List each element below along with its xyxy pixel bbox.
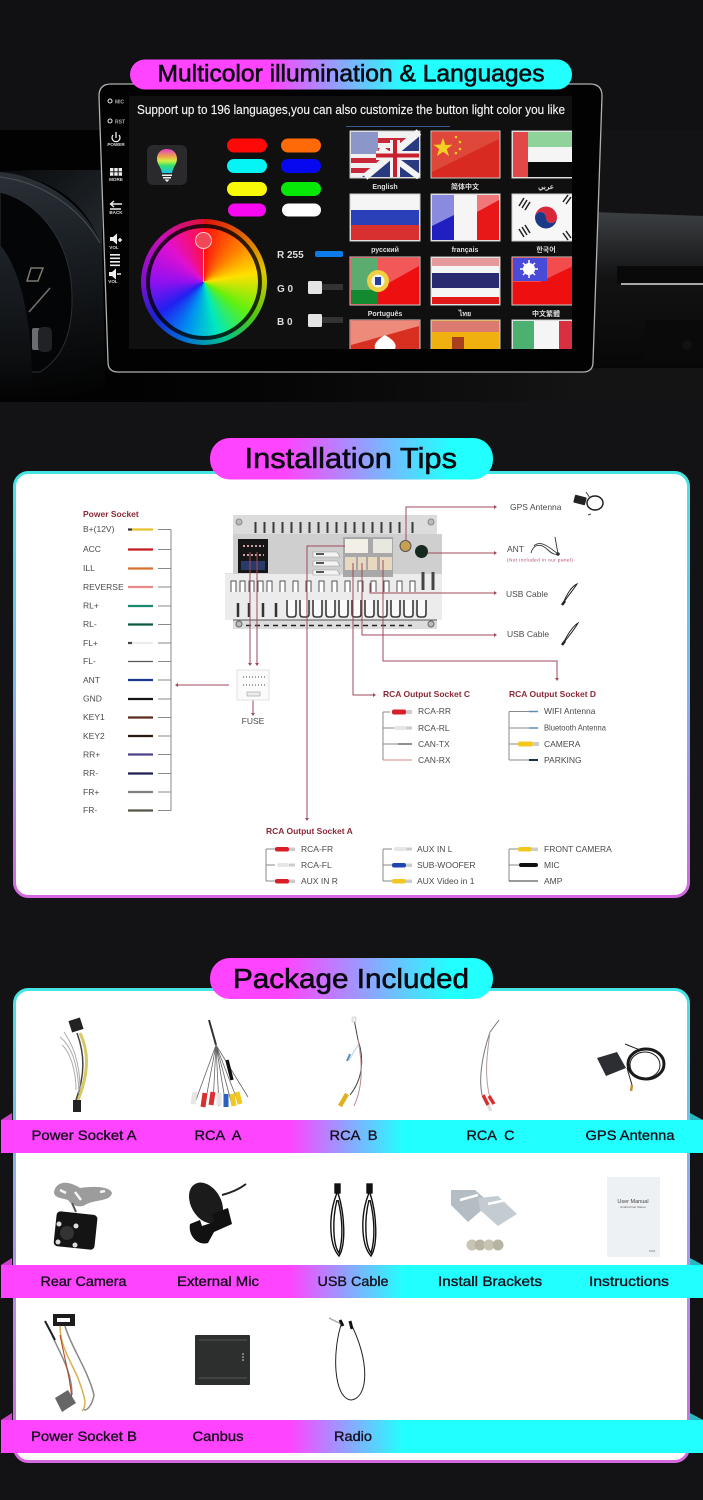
power socket list: RL+ <box>83 600 99 610</box>
peripheral labels: USB Cable <box>507 629 549 639</box>
flag: English <box>350 131 420 178</box>
power socket list: KEY1 <box>83 712 105 722</box>
power socket list: KEY2 <box>83 731 105 741</box>
side control icons: BACK <box>109 210 123 215</box>
RCA output socket D <box>509 689 606 765</box>
flag language labels: 简体中文 <box>451 182 479 191</box>
RCA output socket A <box>266 826 612 886</box>
peripheral labels: (Not included in our panel) <box>507 558 573 564</box>
title pill: multicolor illumination: Multicolor illumination & Languages <box>158 60 544 88</box>
flag language labels: русский <box>371 246 399 254</box>
flag: Arabic <box>512 131 574 178</box>
RCA output socket A: RCA Output Socket A <box>266 826 353 836</box>
peripheral labels <box>506 502 573 639</box>
side control icons: VOL <box>108 279 118 284</box>
RGB sliders: R 255 <box>277 250 304 261</box>
fuse box <box>237 670 269 726</box>
item: external microphone <box>182 1176 246 1243</box>
heading: installation tips: Installation Tips <box>244 443 457 475</box>
RGB sliders: G 0 <box>277 284 294 295</box>
icon: USB cable 2 <box>562 623 578 645</box>
band 1 of labels: Power Socket A <box>32 1127 137 1143</box>
plugs: third column: FRONT CAMERA <box>544 844 612 854</box>
peripheral labels: ANT <box>507 544 524 554</box>
head unit device frame <box>99 84 602 372</box>
flag: Italian <box>512 320 572 349</box>
flag language labels: français <box>452 247 479 254</box>
plugs: first column <box>266 844 338 886</box>
item: RCA B harness <box>340 1017 362 1106</box>
plugs: second column: AUX Video in 1 <box>417 876 475 886</box>
RCA output socket C: RCA Output Socket C <box>383 689 470 699</box>
flag language labels: English <box>372 184 398 191</box>
item: power socket A harness <box>60 1017 86 1112</box>
flag: Portuguese <box>350 257 420 305</box>
RCA output socket D: WIFI Antenna <box>544 706 596 716</box>
flag: Korean <box>512 194 574 241</box>
power socket list: ILL <box>83 563 95 573</box>
flag: French <box>431 194 500 241</box>
plugs: first column: RCA-FR <box>301 844 333 854</box>
socket wires <box>128 530 153 810</box>
power socket list: FR- <box>83 805 97 815</box>
item: instructions manual: User Manual <box>617 1199 649 1205</box>
item: install brackets and screws <box>451 1190 517 1250</box>
power socket list: FR+ <box>83 787 99 797</box>
band 1 of labels: RCA C <box>466 1127 514 1143</box>
plugs: first column: AUX IN R <box>301 876 338 886</box>
support text: Support up to 196 languages,you can also customize the button light color you like <box>137 102 565 117</box>
item: rear camera <box>53 1183 112 1250</box>
flag language labels: ไทย <box>458 309 471 318</box>
side control icons: RST <box>115 120 125 126</box>
power socket list: RL- <box>83 619 97 629</box>
power socket list: ANT <box>83 675 100 685</box>
item: GPS antenna <box>597 1044 664 1091</box>
side control icons: MIC <box>115 100 125 106</box>
heading: package included <box>210 958 493 999</box>
band 2 of labels: External Mic <box>177 1273 259 1289</box>
power socket list: Power Socket <box>83 509 139 519</box>
power socket list: GND <box>83 694 102 704</box>
language flags <box>346 126 574 360</box>
item: RCA A harness <box>193 1020 248 1107</box>
flag: Spanish <box>430 320 500 349</box>
item: USB cables <box>331 1184 376 1256</box>
band 3 of labels: Power Socket B <box>31 1428 137 1444</box>
background photo: car dashboard <box>0 0 703 402</box>
flag: Traditional Chinese <box>512 257 574 305</box>
colour buttons <box>227 138 321 216</box>
RGB sliders: B 0 <box>277 317 293 328</box>
lower vent slots <box>238 603 276 617</box>
band 3 of labels: Canbus <box>192 1428 244 1444</box>
band 3 of labels: Radio <box>334 1428 372 1444</box>
peripheral labels: GPS Antenna <box>510 502 562 512</box>
band 1 of labels <box>1 1113 703 1153</box>
icon: AM/FM antenna <box>531 537 559 555</box>
flag language labels: 中文繁體 <box>532 309 560 318</box>
flag: Simplified Chinese <box>431 131 500 178</box>
side control icons: VOL <box>109 245 119 250</box>
RCA connector block <box>343 537 393 577</box>
side control icons: MORE <box>109 177 123 182</box>
plugs: third column: MIC <box>544 860 560 870</box>
item: RCA C harness <box>481 1020 499 1111</box>
RCA output socket C: CAN-TX <box>418 739 450 749</box>
item: radio antenna lead <box>329 1318 365 1400</box>
item: instructions manual <box>607 1177 660 1257</box>
side control icons: POWER <box>107 142 125 147</box>
RCA output socket C: RCA-RR <box>418 706 451 716</box>
band 2 of labels: Install Brackets <box>438 1273 542 1289</box>
power socket list: RR- <box>83 768 98 778</box>
screen <box>129 96 572 349</box>
flag language labels: 한국어 <box>536 245 556 254</box>
band 1 of labels: RCA B <box>330 1127 378 1143</box>
band 1 of labels: RCA A <box>194 1127 242 1143</box>
plugs: second column: AUX IN L <box>417 844 453 854</box>
flag language labels: عربي <box>538 184 554 192</box>
RCA output socket C: RCA-RL <box>418 723 450 733</box>
heading: installation tips <box>210 438 493 480</box>
band 2 of labels: USB Cable <box>318 1273 389 1289</box>
icon: USB cable 1 <box>562 584 577 605</box>
power socket list: FL+ <box>83 638 98 648</box>
peripheral labels: USB Cable <box>506 589 548 599</box>
band 2 of labels: Instructions <box>589 1273 669 1289</box>
band 3 of labels <box>1 1413 703 1453</box>
power socket list: REVERSE <box>83 582 124 592</box>
rear panel of head unit <box>225 515 442 629</box>
icon: GPS antenna <box>573 492 603 515</box>
panel: installation tips <box>14 472 688 896</box>
RCA output socket D: PARKING <box>544 755 582 765</box>
power socket list <box>83 509 171 815</box>
power socket list: RR+ <box>83 750 100 760</box>
flag language labels <box>368 182 560 318</box>
plugs: first column: RCA-FL <box>301 860 332 870</box>
black power connector <box>238 539 268 573</box>
item: instructions manual: V3.0 <box>649 1249 656 1253</box>
RCA output socket C: CAN-RX <box>418 755 451 765</box>
item: power socket B harness <box>45 1314 94 1412</box>
band 2 of labels: Rear Camera <box>40 1273 127 1289</box>
flag: Russian <box>350 194 420 241</box>
RCA output socket D: CAMERA <box>544 739 581 749</box>
plugs: third column: AMP <box>544 876 563 886</box>
heading: package included: Package Included <box>233 963 469 994</box>
mid vent slots <box>231 581 415 592</box>
power socket list: B+(12V) <box>83 524 115 534</box>
antenna ports <box>400 540 411 552</box>
flag: Thai <box>431 257 500 305</box>
RCA output socket D: RCA Output Socket D <box>509 689 596 699</box>
power socket list: FL- <box>83 656 96 666</box>
fuse box: FUSE <box>242 716 265 726</box>
power socket list: ACC <box>83 544 101 554</box>
band 2 of labels <box>1 1258 703 1298</box>
bulb icon <box>147 145 187 185</box>
top vent slots <box>256 522 412 533</box>
plugs: second column <box>383 844 476 886</box>
flag: Hong Kong <box>350 320 420 349</box>
metal clips <box>313 552 340 575</box>
RCA output socket C <box>383 689 470 765</box>
plugs: third column <box>509 844 612 886</box>
item: instructions manual: Android Car Stereo <box>620 1205 646 1209</box>
band 1 of labels: GPS Antenna <box>586 1127 675 1143</box>
panel: package included <box>14 990 688 1462</box>
colour wheel <box>141 219 267 345</box>
RCA output socket D: Bluetooth Antenna <box>544 722 606 732</box>
flag language labels: Português <box>368 311 402 318</box>
item: canbus box <box>195 1335 250 1385</box>
RGB sliders <box>277 250 343 328</box>
connector lines <box>175 505 559 821</box>
plugs: second column: SUB-WOOFER <box>417 860 476 870</box>
side control icons <box>107 99 125 284</box>
